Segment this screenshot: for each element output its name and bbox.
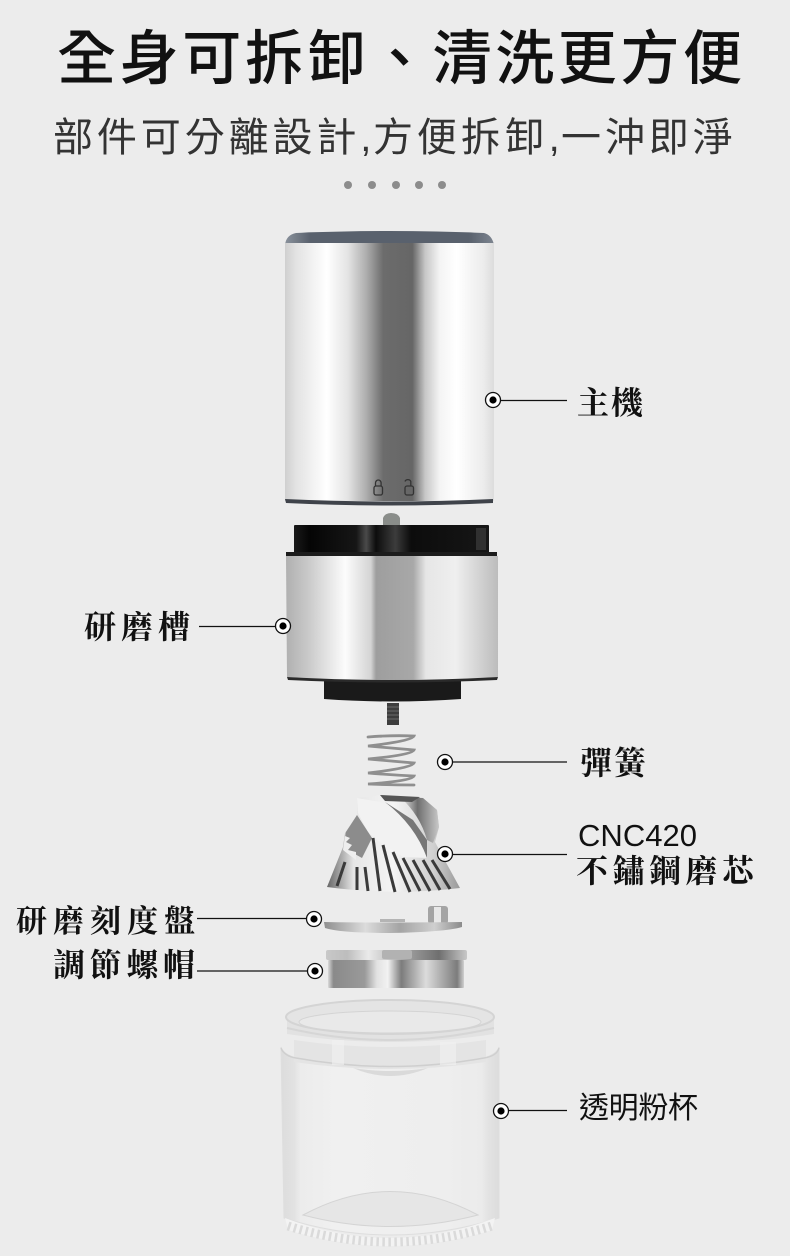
steel burr — [327, 795, 460, 892]
adjusting nut — [326, 950, 467, 988]
title: 全身可拆卸、清洗更方便 — [57, 26, 742, 92]
callout: main unit: 主機 — [577, 385, 644, 421]
subtitle: 部件可分離設計, — [53, 116, 375, 160]
callout: grinding chamber: 研磨槽 — [84, 609, 190, 645]
callout: grinding chamber — [84, 609, 290, 645]
subtitle: 方便拆卸, — [373, 116, 564, 160]
spring — [368, 736, 414, 785]
callout: adjusting nut: 調節螺帽 — [53, 947, 195, 983]
callout: CNC420 burr: 不鏽鋼磨芯 — [576, 853, 757, 889]
callout: CNC420 burr: CNC420 — [578, 818, 697, 853]
grinding chamber — [286, 513, 498, 725]
callout: powder cup: 透明粉杯 — [579, 1092, 698, 1125]
callout: grinding dial: 研磨刻度盤 — [16, 904, 195, 939]
transparent powder cup — [281, 1000, 499, 1246]
callout: spring — [438, 745, 650, 781]
callout: main unit — [486, 385, 644, 421]
callout: CNC420 burr — [438, 818, 757, 889]
icon: unlocked padlock — [405, 480, 414, 495]
callout: grinding dial — [16, 904, 322, 939]
main unit cylinder — [285, 231, 494, 506]
grinding dial plate — [324, 906, 462, 933]
callout: spring: 彈簧 — [580, 745, 650, 781]
pagination dots — [344, 181, 446, 189]
callout: powder cup — [494, 1092, 698, 1125]
icon: locked padlock — [374, 480, 382, 495]
subtitle: 一沖即淨 — [561, 116, 737, 160]
callout: adjusting nut — [53, 947, 322, 983]
